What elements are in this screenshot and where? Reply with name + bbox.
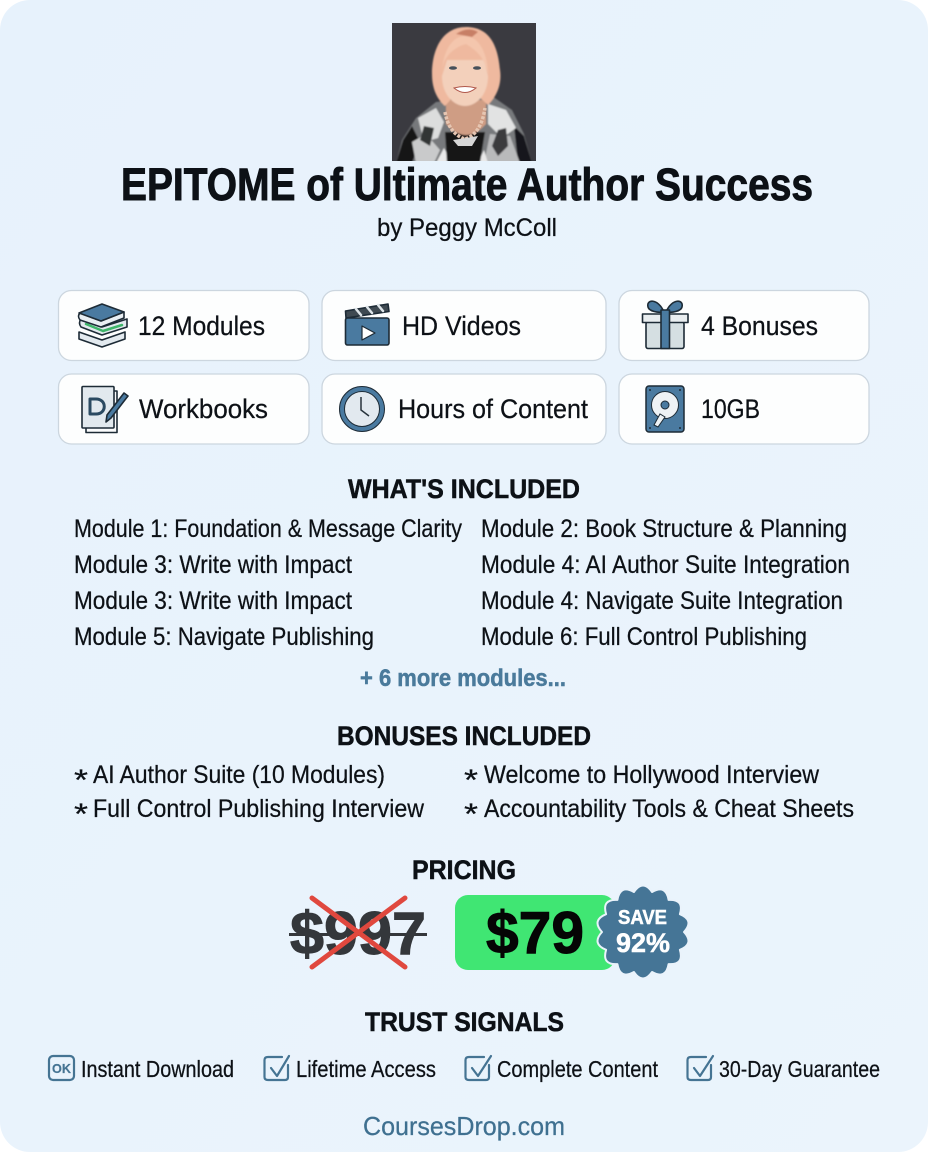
icon: OK badge: OK <box>52 1061 72 1076</box>
bonus list: * <box>74 798 88 831</box>
feature card: 4 Bonuses: 4 Bonuses <box>701 311 818 341</box>
feature card: Workbooks <box>58 374 309 444</box>
feature card: 12 Modules: 12 Modules <box>138 311 265 341</box>
module list: Module 2: Book Structure & Planning <box>481 515 847 543</box>
icon: clapperboard <box>346 304 389 345</box>
icon: hard drive <box>646 386 684 432</box>
feature card: HD Videos <box>322 290 606 360</box>
module list: Module 1: Foundation & Message Clarity <box>74 515 462 543</box>
module list: Module 3: Write with Impact <box>74 587 352 615</box>
icon: gift <box>642 301 688 348</box>
more modules note: + 6 more modules... <box>360 665 566 692</box>
bonus list: * <box>464 798 478 831</box>
module list: Module 4: Navigate Suite Integration <box>481 587 843 615</box>
module list: Module 3: Write with Impact <box>74 551 352 579</box>
feature card: 10GB: 10GB <box>701 394 760 424</box>
bonus list: Welcome to Hollywood Interview <box>484 761 820 789</box>
module list: Module 4: AI Author Suite Integration <box>481 551 850 579</box>
savings badge: SAVE <box>618 907 667 929</box>
feature card: 4 Bonuses <box>619 290 869 360</box>
savings badge: 92% <box>616 928 670 958</box>
trust signal: 30-day guarantee: 30-Day Guarantee <box>719 1056 880 1082</box>
bonus list: Full Control Publishing Interview <box>93 795 425 823</box>
new price: $79 <box>486 900 584 966</box>
bonus list: * <box>464 764 478 797</box>
icon: OK badge <box>49 1056 74 1080</box>
bonus list: * <box>74 764 88 797</box>
trust signal: lifetime access: Lifetime Access <box>296 1056 436 1082</box>
footer brand: CoursesDrop.com <box>363 1111 565 1141</box>
feature card: Hours of Content: Hours of Content <box>398 394 588 424</box>
bonus list: AI Author Suite (10 Modules) <box>93 761 385 789</box>
heading: trust signals: TRUST SIGNALS <box>365 1007 564 1037</box>
feature card: 12 Modules <box>58 290 309 360</box>
feature card: 10GB <box>619 374 869 444</box>
feature card: Workbooks: Workbooks <box>139 394 268 424</box>
icon: workbook and pencil <box>82 386 128 432</box>
icon: clock <box>340 386 384 432</box>
bonus list <box>74 761 854 831</box>
module list: Module 5: Navigate Publishing <box>74 623 374 651</box>
subtitle: by Peggy McColl <box>377 214 557 242</box>
feature card: Hours of Content <box>322 374 606 444</box>
heading: bonuses included: BONUSES INCLUDED <box>337 721 591 751</box>
title: EPITOME of Ultimate Author Success <box>121 159 813 210</box>
heading: what's included: WHAT'S INCLUDED <box>348 474 580 504</box>
savings badge <box>598 886 688 978</box>
new price <box>455 895 615 970</box>
feature card: HD Videos: HD Videos <box>402 311 521 341</box>
heading: pricing: PRICING <box>412 855 516 885</box>
module list <box>74 515 850 651</box>
icon: books <box>78 304 127 347</box>
icon: check box <box>466 1056 491 1080</box>
module list: Module 6: Full Control Publishing <box>481 623 807 651</box>
trust signal: instant download: Instant Download <box>81 1056 234 1082</box>
author photo <box>392 23 536 163</box>
bonus list: Accountability Tools & Cheat Sheets <box>484 795 854 823</box>
trust signal: complete content: Complete Content <box>497 1056 659 1082</box>
old price struck out: $997 <box>290 900 426 967</box>
icon: check box <box>264 1056 289 1080</box>
icon: check box <box>688 1056 713 1080</box>
